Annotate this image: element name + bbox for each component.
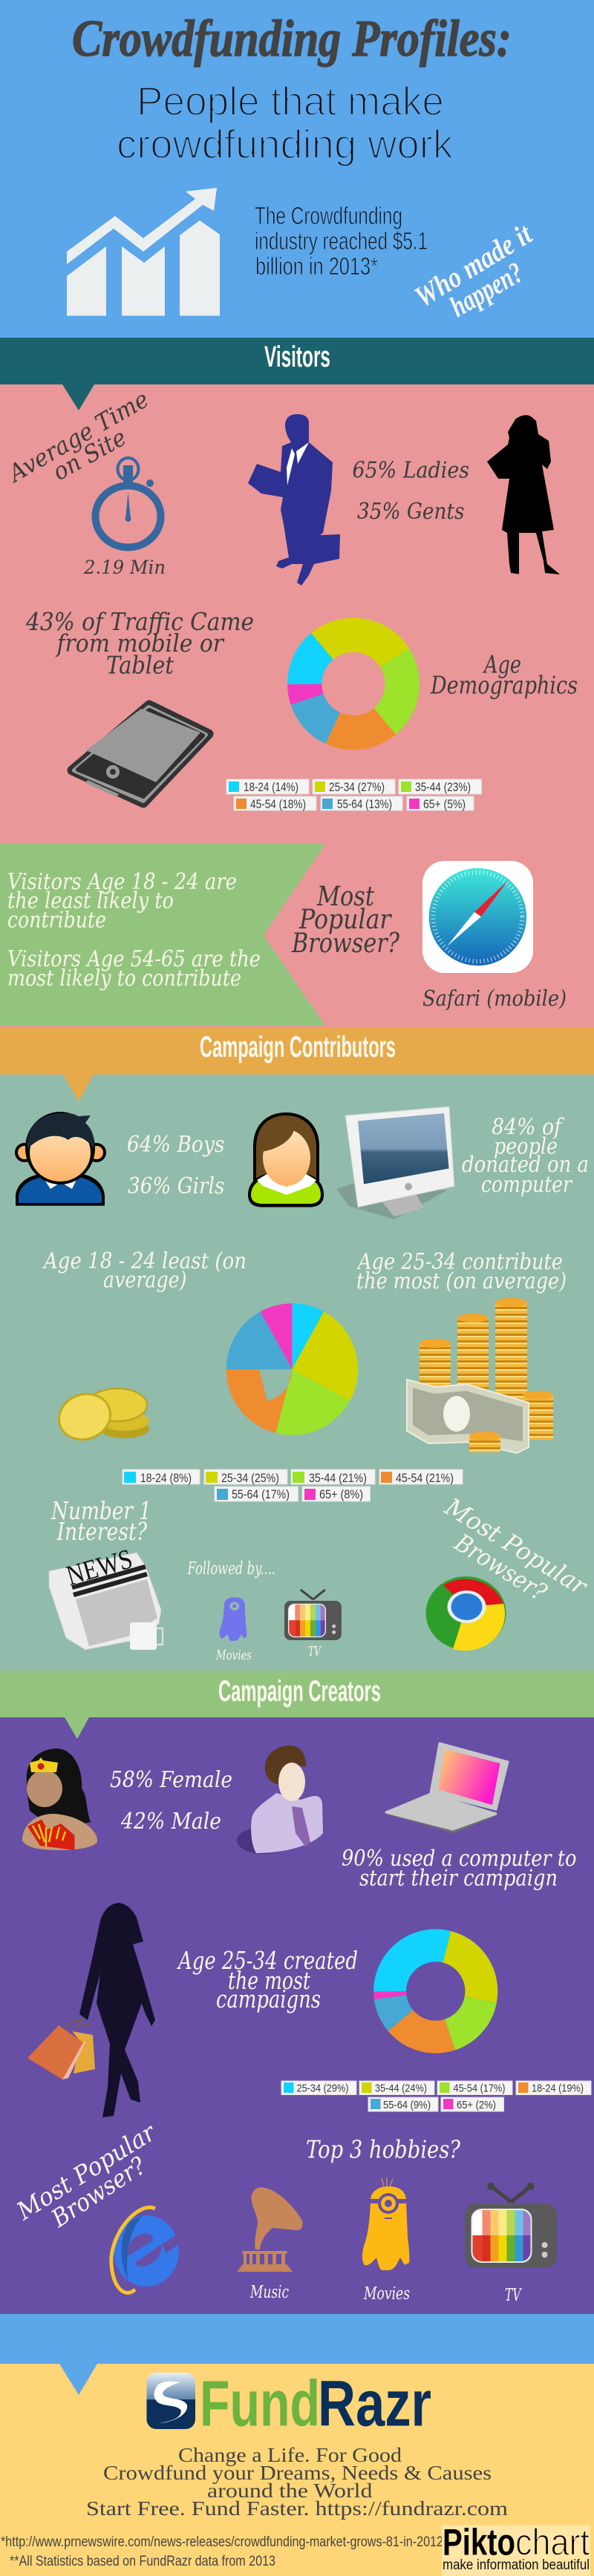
legend: creator age: 45-54 (17%) [453, 2082, 506, 2094]
mobile traffic text: 43% of Traffic Came [25, 607, 254, 636]
number 1 interest label [50, 1496, 151, 1546]
footnotes: **All Statistics based on FundRazr data from 2013 [10, 2554, 275, 2569]
age demographics label [430, 649, 578, 699]
age demographics label: Age [483, 649, 521, 678]
legend: visitor age: 25-34 (27%) [329, 780, 385, 794]
icon: newspaper and mug [49, 1543, 163, 1650]
panel: visitors [0, 338, 594, 1028]
icon: businessman silhouette [248, 414, 340, 586]
icon: stopwatch [95, 458, 160, 548]
watermark: piktochart [442, 2522, 590, 2576]
icon: growth chart with arrow [67, 188, 220, 316]
age most text [356, 1249, 567, 1294]
desktop donation text: people [494, 1134, 558, 1159]
gender split text: 58% Female [110, 1767, 232, 1793]
heading: campaign creators banner [0, 1671, 594, 1739]
icon: woman silhouette [79, 1903, 155, 2117]
icon: boy avatar [15, 1112, 106, 1206]
heading: campaign contributors banner [0, 1028, 594, 1101]
legend: creator age: 18-24 (19%) [532, 2082, 584, 2094]
top hobbies label: Top 3 hobbies? [306, 2134, 460, 2164]
most popular browser label [291, 882, 400, 959]
hobby labels [249, 2283, 522, 2305]
industry statistic text: billion in 2013* [255, 252, 378, 280]
most popular browser label: Browser? [291, 928, 400, 959]
icon: safari compass [422, 861, 533, 973]
watermark: piktochart: Pikto [443, 2522, 515, 2563]
gender split text [352, 457, 469, 525]
legend: visitor age: 35-44 (23%) [415, 780, 471, 794]
legend: creator age: 35-44 (24%) [375, 2082, 427, 2094]
panel: contribution ribbon [0, 844, 325, 1026]
contribution likelihood text: Visitors Age 54-65 are the [7, 946, 261, 972]
hobby labels: Music [249, 2283, 289, 2302]
tagline text: around the World [207, 2480, 373, 2502]
icon: gramophone [237, 2187, 303, 2272]
industry statistic text [255, 202, 428, 280]
most popular browser label: Most [316, 882, 374, 912]
panel: header [0, 0, 594, 338]
age most text: Age 25-34 contribute [356, 1249, 563, 1275]
legend: visitor age: 55-64 (13%) [337, 797, 392, 811]
gender split text: 42% Male [120, 1809, 221, 1835]
icon: desktop computer [336, 1107, 454, 1219]
creators age text: campaigns [216, 1985, 321, 2013]
legend: contributor age: 55-64 (17%) [232, 1487, 290, 1501]
movies and tv labels [215, 1644, 322, 1663]
title: Crowdfunding Profiles: [72, 10, 512, 68]
icon: internet explorer logo [111, 2207, 180, 2292]
legend: creator age: 25-34 (29%) [297, 2082, 349, 2094]
icon: tv [465, 2183, 557, 2267]
movies and tv labels: TV [308, 1644, 322, 1659]
icon: minion movies [362, 2177, 409, 2270]
number 1 interest label: Number 1 [50, 1496, 151, 1525]
creators age text [177, 1946, 358, 2013]
legend: contributor age: 65+ (8%) [319, 1487, 363, 1501]
footnotes [1, 2534, 443, 2569]
arrow: footer pointer [59, 2364, 97, 2395]
computer usage text: start their campaign [359, 1866, 558, 1891]
contribution likelihood text: most likely to contribute [7, 966, 241, 992]
legend: contributor age: 45-54 (21%) [396, 1471, 454, 1485]
logo: fundrazr [147, 2367, 431, 2439]
icon: coins [53, 1387, 149, 1446]
creators age text: Age 25-34 created [177, 1946, 358, 1975]
industry statistic text: The Crowdfunding [255, 202, 402, 229]
icon: coin stacks and banknote [407, 1298, 553, 1453]
gender split text: 65% Ladies [352, 457, 469, 484]
panel: campaign contributors [0, 1028, 594, 1671]
hobby labels: TV [505, 2286, 522, 2305]
most popular browser rotated label: Browser? [449, 1527, 552, 1607]
legend: contributor age [123, 1469, 463, 1501]
subtitle [117, 78, 453, 167]
contribution likelihood text: Visitors Age 18 - 24 are [7, 869, 237, 895]
gender split text [127, 1132, 224, 1199]
age least text [42, 1248, 247, 1294]
logo: fundrazr: Razr [318, 2367, 431, 2439]
legend: visitor age: 45-54 (18%) [250, 797, 306, 811]
icon: tv small [284, 1590, 342, 1640]
heading: campaign creators banner: Campaign Creators [218, 1675, 381, 1708]
contributor age pie chart [259, 1337, 325, 1402]
tagline text: Start Free. Fund Faster. https://fundrazr.com [86, 2497, 508, 2520]
icon: chrome logo [426, 1576, 506, 1651]
contribution likelihood text: contribute [7, 907, 106, 934]
mobile traffic text [25, 607, 254, 680]
desktop donation text [462, 1115, 589, 1198]
most popular browser rotated label: Most Popular [11, 2117, 162, 2226]
number 1 interest label: Interest? [56, 1517, 147, 1546]
heading: campaign contributors banner: Campaign Contributors [200, 1031, 396, 1063]
average time label: Average Time [2, 385, 154, 488]
creators age text: the most [228, 1966, 311, 1995]
callout: who made it happen: happen? [444, 255, 529, 324]
icon: laptop [386, 1743, 508, 1833]
icon: minion movies small [219, 1597, 247, 1641]
icon: girl avatar [248, 1112, 324, 1207]
computer usage text [342, 1846, 576, 1891]
contribution likelihood text: the least likely to [7, 888, 174, 914]
desktop donation text: 84% of [492, 1115, 564, 1140]
legend: visitor age: 65+ (5%) [423, 797, 466, 811]
tagline text [86, 2444, 508, 2520]
most popular browser rotated label: Most Popular [440, 1492, 593, 1602]
contribution likelihood text [7, 869, 261, 992]
age demographics donut chart [304, 635, 402, 733]
legend: contributor age: 18-24 (8%) [140, 1471, 192, 1485]
legend: contributor age: 35-44 (21%) [309, 1471, 367, 1485]
gender split text [110, 1767, 232, 1835]
legend: creator age [281, 2081, 591, 2111]
age least text: Age 18 - 24 least (on [42, 1248, 247, 1274]
panel: footer [0, 2314, 594, 2576]
gender split text: 35% Gents [357, 499, 465, 525]
logo: fundrazr: Fund [200, 2367, 320, 2439]
most popular browser rotated label: Browser? [45, 2151, 151, 2233]
legend: contributor age: 25-34 (25%) [221, 1471, 279, 1485]
icon: shopping bags [27, 2020, 95, 2080]
icon: woman silhouette [487, 415, 560, 574]
legend: visitor age: 18-24 (14%) [244, 780, 298, 794]
mobile traffic text: from mobile or [55, 629, 225, 658]
heading: visitors banner [0, 338, 594, 410]
heading: visitors banner: Visitors [264, 341, 330, 373]
panel: campaign creators [0, 1671, 594, 2314]
footnotes: *http://www.prnewswire.com/news-releases/crowdfunding-market-grows-81-in-2012 [1, 2534, 443, 2550]
legend: creator age: 65+ (2%) [457, 2099, 496, 2111]
subtitle: People that make [137, 78, 444, 124]
tagline text: Change a Life. For Good [178, 2444, 402, 2466]
stopwatch value: 2.19 Min [83, 557, 166, 578]
hobby labels: Movies [363, 2284, 410, 2304]
followed by label: Followed by.... [187, 1559, 275, 1579]
gender split text: 36% Girls [128, 1173, 224, 1199]
most popular browser label: Popular [298, 905, 392, 935]
mobile traffic text: Tablet [106, 650, 174, 680]
legend: creator age: 55-64 (9%) [383, 2099, 431, 2111]
creators age donut chart [390, 1945, 481, 2037]
icon: female avatar [22, 1749, 97, 1850]
tagline text: Crowdfund your Dreams, Needs & Causes [103, 2462, 492, 2484]
icon: newspaper and mug: NEWS [63, 1543, 136, 1592]
legend: visitor age [226, 779, 481, 811]
callout: who made it happen: Who made it [408, 217, 538, 314]
industry statistic text: industry reached $5.1 [255, 227, 428, 255]
movies and tv labels: Movies [215, 1648, 252, 1663]
icon: male avatar [237, 1746, 323, 1854]
icon: smartphone [72, 705, 209, 803]
gender split text: 64% Boys [127, 1132, 224, 1158]
subtitle: crowdfunding work [117, 121, 453, 167]
age least text: average) [103, 1268, 187, 1294]
average time label: on Site [48, 423, 131, 486]
desktop donation text: computer [481, 1172, 572, 1198]
safari label: Safari (mobile) [422, 986, 567, 1011]
